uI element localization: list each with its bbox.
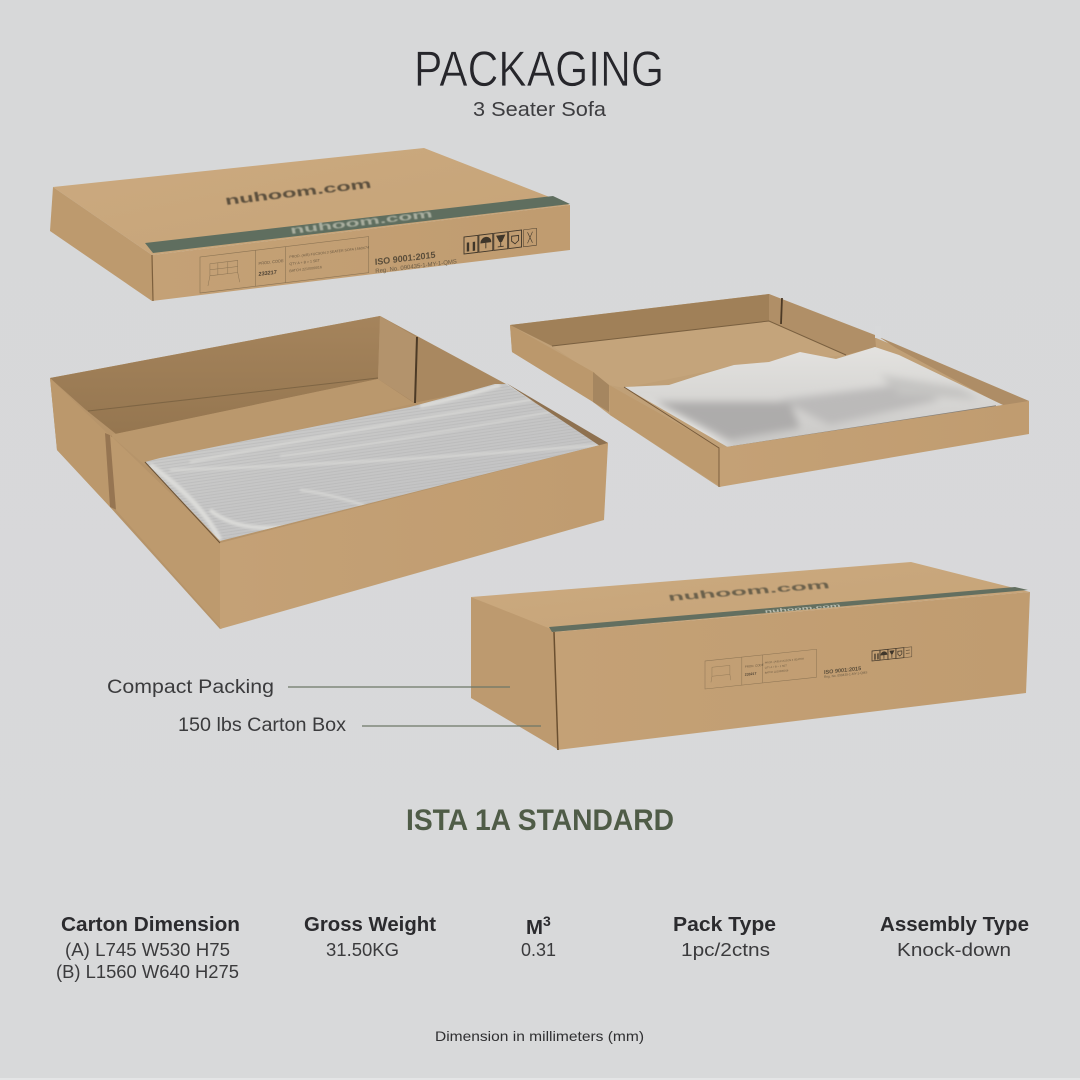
subtitle: 3 Seater Sofa <box>473 99 607 121</box>
spec: carton dimension: (B) L1560 W640 H275 <box>56 962 239 982</box>
green tape stripe <box>145 196 570 253</box>
carton label table: 233217 <box>745 672 756 677</box>
title: PACKAGING <box>414 41 664 97</box>
spec: volume: 3 <box>543 913 551 929</box>
spec: volume: M <box>526 917 543 939</box>
spec: carton dimension <box>56 914 240 982</box>
ISO mark: ISO 9001:2015 <box>375 250 436 267</box>
spec: assembly type <box>880 914 1029 960</box>
closed flat carton A <box>50 148 570 301</box>
green tape stripe <box>549 587 1028 632</box>
carton label table: 233217 <box>259 270 277 278</box>
spec: pack type: Pack Type <box>673 914 776 936</box>
spec: volume: 0.31 <box>521 940 556 960</box>
ISO mark <box>375 247 457 275</box>
closed long carton B <box>471 562 1030 750</box>
top logo: nuhoom.com <box>224 176 373 208</box>
carton label table: PROD. CODE <box>259 258 284 266</box>
spec: pack type: 1pc/2ctns <box>681 940 770 960</box>
carton label table: PROD. CODE <box>745 663 764 669</box>
tape logo: nuhoom.com <box>764 603 842 615</box>
spec: gross weight <box>304 914 436 960</box>
ISO mark: Reg. No. 090435-1-MY-1-QMS <box>375 259 457 275</box>
callout: compact packing: Compact Packing <box>107 677 274 698</box>
spec: carton dimension: (A) L745 W530 H75 <box>65 940 230 960</box>
ISO mark: Reg. No. 090435-1-MY-1-QMS <box>824 670 867 679</box>
spec: assembly type: Knock-down <box>897 940 1011 960</box>
handling icons <box>464 228 536 254</box>
carton label table: QTY A + B = 1 SET <box>765 663 787 670</box>
carton label table: PROD. (A/B) FUCSON 3 SEATER SOFA 1560X74 <box>289 246 369 259</box>
spec: pack type <box>673 914 776 960</box>
carton label table: BATCH 2210000016 <box>289 265 322 273</box>
carton label table <box>705 649 816 689</box>
sofa wrapped in film <box>145 384 600 541</box>
handling icons <box>872 647 912 661</box>
standard heading: ISTA 1A STANDARD <box>406 804 674 837</box>
carton label table: BATCH 2210000016 <box>765 668 789 675</box>
carton label table: PROD. (A/B) FUCSON 3 SEATER <box>765 657 804 665</box>
spec: assembly type: Assembly Type <box>880 914 1029 936</box>
footnote: Dimension in millimeters (mm) <box>435 1028 644 1044</box>
ISO mark: ISO 9001:2015 <box>824 666 861 676</box>
spec: carton dimension: Carton Dimension <box>61 914 240 936</box>
spec: gross weight: Gross Weight <box>304 914 436 936</box>
carton label table <box>200 237 369 293</box>
carton label table: QTY A + B = 1 SET <box>289 258 321 266</box>
top logo: nuhoom.com <box>667 579 832 604</box>
tape logo: nuhoom.com <box>289 208 434 237</box>
ISO mark <box>824 665 867 679</box>
callout: carton box strength: 150 lbs Carton Box <box>178 715 347 736</box>
open carton A with sofa part <box>50 316 608 629</box>
open carton B with sofa part <box>510 294 1029 487</box>
sofa part wrapped in film <box>624 347 1003 450</box>
spec: volume <box>521 913 556 960</box>
spec: gross weight: 31.50KG <box>326 940 399 960</box>
